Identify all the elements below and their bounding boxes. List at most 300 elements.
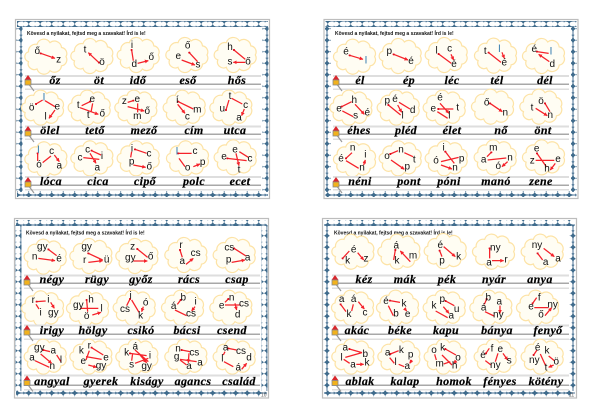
cloud: cica: a (95, 162, 101, 173)
cloud: cím: í (176, 95, 179, 106)
cloud: dél: é (532, 44, 538, 55)
cloud: család: á (236, 362, 242, 373)
writing line row 1: nyár (482, 272, 506, 286)
cloud: fényes: s (507, 356, 512, 367)
writing line row 2: cím (184, 123, 204, 137)
cloud: utca: t (229, 91, 232, 102)
cloud: csend: e (219, 301, 225, 312)
cloud: akác: k (346, 309, 351, 320)
writing line row 3: gyerek (83, 374, 118, 388)
cloud: kiságy: i (149, 351, 151, 362)
cloud: éhes: é (365, 107, 371, 118)
cloud: pont: p (405, 162, 411, 173)
panel: page 8 (16, 20, 270, 198)
page number: 11 (569, 392, 574, 398)
cloud: utca (210, 90, 252, 125)
cloud: őz (25, 39, 67, 74)
cloud: család: a (223, 342, 229, 353)
cloud: család: l (221, 353, 223, 364)
cloud: önt: n (548, 110, 553, 121)
cloud: kapu: k (431, 301, 436, 312)
cloud: bánya: á (481, 303, 487, 314)
cloud: gyerek: e (81, 356, 87, 367)
cloud: tető: ő (100, 108, 106, 119)
writing line row 3: kötény (529, 374, 564, 388)
writing line row 2: akác (345, 323, 370, 337)
writing line row 2: irigy (40, 323, 65, 337)
cloud: mák: m (409, 250, 417, 261)
cloud: néni: n (359, 163, 365, 174)
cloud: akác: a (339, 294, 345, 305)
cloud: kötény (521, 339, 563, 374)
cloud: éhes: h (352, 95, 357, 106)
cloud: ecet: e (232, 144, 238, 155)
writing line row 2: éhes (347, 123, 371, 137)
cloud: cica: c (77, 152, 82, 163)
cloud: homok: o (431, 345, 437, 356)
clouds row 2 (331, 290, 558, 325)
writing line row 3: pont (396, 174, 421, 188)
cloud: lóca: l (37, 145, 39, 156)
cloud: mező (115, 90, 157, 125)
cloud: hölgy: h (88, 294, 94, 305)
cloud: anya: a (543, 257, 549, 268)
cloud: kötény: ö (554, 357, 560, 368)
cloud: kötény: ny (529, 355, 540, 366)
cloud: polc: o (185, 162, 191, 173)
writing line row 1: tél (490, 73, 504, 87)
writing line row 2: pléd (394, 123, 418, 137)
writing line row 1 (24, 73, 261, 91)
cloud: önt: t (531, 102, 534, 113)
cloud: fényes: e (498, 344, 504, 355)
cloud: őz: z (56, 54, 61, 65)
cloud: irigy: i (47, 294, 49, 305)
cloud: család: cs (236, 346, 246, 357)
cloud: angyal: l (60, 355, 62, 366)
cloud: angyal (24, 339, 66, 374)
cloud: angyal: gy (34, 342, 45, 353)
cloud: rügy: r (83, 255, 87, 266)
cloud: cica (71, 141, 113, 176)
cloud: bácsi: i (195, 297, 197, 308)
page number: 10 (261, 392, 267, 398)
cloud: kiságy (116, 339, 158, 374)
writing line row 1: hős (228, 73, 246, 87)
cloud: kapu: u (454, 304, 459, 315)
cloud: anya: ny (532, 240, 542, 251)
cloud: póni: p (459, 154, 465, 165)
writing line row 2: önt (534, 123, 552, 137)
writing line row 2: béke (388, 323, 412, 337)
cloud: kiságy: á (133, 342, 139, 353)
cloud: eső (166, 37, 208, 73)
cloud: utca: c (243, 100, 248, 111)
writing line row 3: ablak (345, 374, 375, 388)
cloud: agancs: a (197, 357, 203, 368)
cloud: győz: z (130, 242, 135, 253)
writing line row 3: manó (481, 174, 511, 188)
writing line row 2: csikó (127, 323, 155, 337)
cloud: csap (213, 237, 255, 273)
cloud: lóca: c (49, 146, 54, 157)
writing line row 3 (332, 374, 569, 392)
cloud: él: é (343, 46, 349, 57)
cloud: angyal: a (29, 352, 35, 363)
cloud: csend: d (235, 309, 240, 320)
cloud: ablak: k (364, 358, 369, 369)
cloud: pont: n (398, 144, 404, 155)
clouds row 3 (24, 339, 255, 374)
cloud: fényes: f (491, 343, 494, 354)
writing line row 1: győz (128, 272, 153, 286)
cloud: fenyő (516, 290, 558, 325)
cloud: csap: a (245, 252, 251, 263)
cloud: kiságy: gy (141, 361, 152, 372)
cloud: cipő: p (129, 157, 135, 168)
cloud: idő (117, 37, 159, 73)
cloud: cím: c (185, 112, 190, 123)
cloud: cipő: i (131, 143, 133, 154)
cloud: élet: l (448, 111, 450, 122)
cloud: akác: á (351, 294, 357, 305)
cloud: dél (522, 38, 564, 74)
cloud: ölel: l (43, 93, 45, 104)
instruction heading: Kövesd a nyilakat, fejtsd meg a szavakat! Írd is le! (27, 29, 146, 37)
cloud: ölel: e (55, 102, 61, 113)
writing line row 1: ép (403, 73, 415, 87)
writing line row 2: csend (217, 323, 248, 337)
cloud: gyerek (70, 339, 112, 374)
cloud: cica: i (101, 151, 103, 162)
cloud: kalap: l (395, 357, 397, 368)
cloud: csikó: k (138, 311, 143, 322)
cloud: tető: t (77, 100, 80, 111)
cloud: mák: k (394, 255, 399, 266)
cloud: nyár: ny (490, 242, 501, 253)
instruction heading: Kövesd a nyilakat, fejtsd meg a szavakat! Írd is le! (26, 228, 145, 236)
clouds row 1 (333, 37, 564, 74)
cloud: póni (425, 141, 467, 176)
cloud: akác (331, 290, 373, 325)
writing line row 3 (332, 174, 569, 193)
cloud: léc: é (451, 59, 457, 70)
cloud: pléd: d (410, 105, 415, 116)
cloud: tél (474, 38, 516, 73)
cloud: csikó: cs (120, 304, 130, 315)
cloud: önt (520, 89, 562, 124)
cloud: tető (68, 90, 110, 125)
writing line row 3: angyal (34, 374, 70, 388)
cloud: fenyő: ny (547, 299, 558, 310)
cloud: homok (424, 339, 466, 374)
cloud: zene (522, 140, 564, 175)
writing line row 2: hölgy (78, 323, 108, 337)
cloud: bánya: a (497, 297, 503, 308)
cloud: angyal: n (50, 361, 55, 372)
cloud: pont (379, 141, 421, 176)
cloud: zene: h (544, 163, 550, 174)
writing line row 3: zene (528, 174, 553, 188)
cloud: hős: s (227, 56, 232, 67)
cloud: hölgy: l (101, 303, 103, 314)
cloud: élet: é (437, 93, 443, 104)
cloud: lóca: ó (36, 159, 42, 170)
clouds row 1 (332, 233, 563, 269)
cloud: agancs (165, 339, 207, 374)
cloud: agancs: cs (189, 347, 199, 358)
cloud: polc: c (192, 146, 197, 157)
cloud: rács: r (179, 240, 183, 251)
cloud: ecet: c (247, 154, 252, 165)
cloud: eső: s (195, 59, 200, 70)
cloud: őz: ő (35, 46, 41, 57)
writing line row 2: tető (85, 123, 105, 137)
cloud: élet: e (431, 103, 437, 114)
cloud: csikó: ó (143, 298, 149, 309)
cloud: él (333, 39, 375, 74)
cloud: csend: n (229, 292, 234, 303)
writing line row 3 (24, 374, 260, 392)
cloud: pék: p (439, 255, 445, 266)
cloud: család: d (246, 353, 252, 364)
writing line row 3: póni (436, 174, 461, 188)
writing line row 3 (24, 174, 261, 193)
cloud: tető: t (87, 110, 90, 121)
cloud: bácsi: á (171, 301, 177, 312)
cloud: dél: l (550, 47, 552, 58)
cloud: irigy (21, 291, 63, 326)
cloud: angyal: a (51, 346, 57, 357)
cloud: léc: c (447, 43, 452, 54)
writing line row 2: kapu (433, 323, 459, 337)
writing line row 2 (24, 123, 261, 142)
writing line row 1: rács (178, 272, 200, 286)
cloud: hős: h (227, 42, 233, 53)
cloud: léc: l (436, 46, 438, 57)
writing line row 2: ölel (40, 123, 60, 137)
writing line row 1: dél (537, 73, 553, 87)
writing line row 1 (332, 272, 569, 291)
cloud: négy: gy (37, 242, 48, 253)
writing line row 2 (24, 323, 260, 341)
cloud: fényes: ny (490, 360, 501, 371)
writing line row 3: kiságy (130, 374, 164, 388)
cloud: idő: i (131, 40, 133, 51)
cloud: élet (423, 90, 465, 125)
clouds row 3 (332, 339, 563, 374)
cloud: mező: m (133, 111, 141, 122)
cloud: tető: e (90, 94, 96, 105)
cloud: pék: é (438, 240, 444, 251)
cloud: cipő (117, 141, 159, 176)
cloud: élet: t (456, 102, 459, 113)
cloud: pléd: é (392, 94, 398, 105)
writing line row 2: bánya (481, 323, 513, 337)
cloud: kéz (332, 234, 374, 269)
instruction heading: Kövesd a nyilakat, fejtsd meg a szavakat! Írd is le! (335, 29, 454, 37)
cloud: bácsi: cs (186, 308, 196, 319)
cloud: agancs: n (175, 343, 181, 354)
writing line row 1 (24, 272, 260, 291)
cloud: zene: z (530, 155, 535, 166)
cloud: kalap: a (405, 361, 411, 372)
cloud: béke: é (383, 296, 389, 307)
clouds row 2 (21, 290, 252, 326)
writing line row 2 (332, 323, 569, 341)
cloud: bánya (470, 290, 512, 325)
cloud: kiságy: s (129, 359, 134, 370)
cloud: rügy: ü (104, 254, 109, 265)
cloud: ablak (332, 339, 374, 374)
cloud: léc (425, 37, 467, 73)
cloud: ablak: l (341, 352, 343, 363)
cloud: anya: a (555, 253, 561, 264)
cloud: néni: é (338, 153, 344, 164)
cloud: kötény: k (544, 346, 549, 357)
cloud: polc: l (176, 147, 178, 158)
writing line row 2: élet (443, 123, 462, 137)
cloud: öt: t (84, 44, 87, 55)
writing line row 2 (332, 123, 569, 142)
cloud: zene: e (534, 143, 540, 154)
cloud: polc (166, 141, 208, 176)
cloud: önt: ö (538, 96, 544, 107)
cloud: bánya: b (486, 293, 492, 304)
cloud: kiságy: k (124, 348, 129, 359)
cloud: dél: d (550, 59, 555, 70)
cloud: kapu: p (440, 294, 446, 305)
cloud: rügy: gy (81, 242, 92, 253)
cloud: manó: m (489, 142, 497, 153)
cloud: ép (379, 38, 421, 74)
cloud: csap: cs (224, 242, 234, 253)
cloud: idő: ő (149, 52, 155, 63)
cloud: csap: p (226, 254, 232, 265)
cloud: manó: ó (496, 161, 502, 172)
cloud: csikó (113, 290, 155, 325)
cloud: cipő: c (146, 148, 151, 159)
cloud: négy: é (56, 253, 62, 264)
writing line row 1: anya (527, 272, 553, 286)
cloud: pék: k (456, 252, 461, 263)
cloud: kalap: p (408, 349, 414, 360)
cloud: ölel: l (45, 112, 47, 123)
cloud: ecet (214, 140, 256, 175)
cloud: béke: e (405, 309, 411, 320)
cloud: cím (163, 90, 205, 125)
cloud: béke (376, 290, 418, 325)
instruction heading: Kövesd a nyilakat, fejtsd meg a szavakat! Írd is le! (334, 228, 453, 236)
writing line row 3: fényes (483, 374, 517, 388)
clouds row 1 (25, 37, 256, 74)
cloud: hős: ő (245, 56, 251, 67)
writing line row 3: agancs (175, 374, 211, 388)
panel: page 9 (324, 20, 578, 198)
cloud: utca: a (236, 112, 242, 123)
writing line row 1: mák (394, 272, 416, 286)
clouds row 3 (25, 140, 256, 177)
writing line row 2: utca (224, 123, 246, 137)
cloud: csend: cs (239, 298, 249, 309)
cloud: hölgy: gy (73, 300, 84, 311)
cloud: pléd: l (402, 111, 404, 122)
cloud: béke: k (401, 298, 406, 309)
cloud: tél: t (484, 46, 487, 57)
cloud: mák: á (394, 241, 400, 252)
writing line row 2: mező (131, 123, 158, 137)
panel: page 10 (14, 218, 268, 398)
writing line row 1: csap (225, 272, 249, 286)
cloud: él: l (365, 55, 367, 66)
cloud: kalap (378, 339, 420, 374)
cloud: fenyő: e (528, 302, 534, 313)
cloud: kalap: k (399, 345, 404, 356)
cloud: rács: cs (191, 248, 201, 259)
writing line row 1: léc (444, 73, 460, 87)
writing line row 3: polc (182, 174, 205, 188)
clouds row 2 (330, 89, 562, 125)
cloud: rács: a (180, 256, 186, 267)
cloud: hölgy: ö (84, 311, 90, 322)
cloud: pont: t (413, 154, 416, 165)
cloud: rügy (70, 238, 112, 274)
cloud: nyár (472, 234, 514, 269)
cloud: anya (521, 234, 563, 269)
cloud: cipő: ő (147, 161, 153, 172)
clouds row 1 (24, 237, 255, 274)
writing line row 3: cipő (134, 174, 157, 188)
cloud: polc: p (200, 157, 206, 168)
cloud: négy: n (32, 251, 37, 262)
cloud: rács (165, 237, 207, 273)
cloud: mező: e (135, 94, 141, 105)
cloud: tél: l (498, 44, 500, 55)
cloud: öt: ö (99, 57, 105, 68)
writing line row 1: őz (49, 73, 61, 87)
writing line row 1: öt (94, 73, 104, 87)
cloud: bánya: ny (493, 309, 504, 320)
cloud: agancs: g (174, 352, 179, 363)
cloud: zene: e (555, 154, 561, 165)
cloud: fenyő: f (538, 293, 541, 304)
cloud: idő: d (132, 59, 137, 70)
cloud: ecet: e (221, 152, 227, 163)
cloud: kapu: a (449, 311, 455, 322)
cloud: mező: z (122, 96, 127, 107)
cloud: nő: n (503, 107, 508, 118)
cloud: pléd: p (385, 96, 391, 107)
cloud: cím: m (193, 104, 201, 115)
writing line row 3: család (222, 374, 256, 388)
writing line row 2: bácsi (173, 323, 201, 337)
cloud: csend (210, 290, 252, 325)
cloud: tél: é (502, 57, 508, 68)
cloud: pont: o (384, 151, 390, 162)
cloud: ablak: a (350, 359, 356, 370)
writing line row 3: kalap (390, 374, 420, 388)
cloud: gyerek: gy (96, 361, 106, 372)
panel: page 11 (322, 218, 576, 398)
cloud: négy (24, 239, 66, 274)
cloud: fenyő: ő (538, 309, 544, 320)
cloud: kötény: é (535, 343, 541, 354)
cloud: kapu (423, 290, 465, 325)
cloud: ép: p (387, 46, 393, 57)
cloud: család (213, 339, 255, 374)
clouds row 2 (21, 90, 252, 125)
cloud: kéz: é (351, 244, 357, 255)
